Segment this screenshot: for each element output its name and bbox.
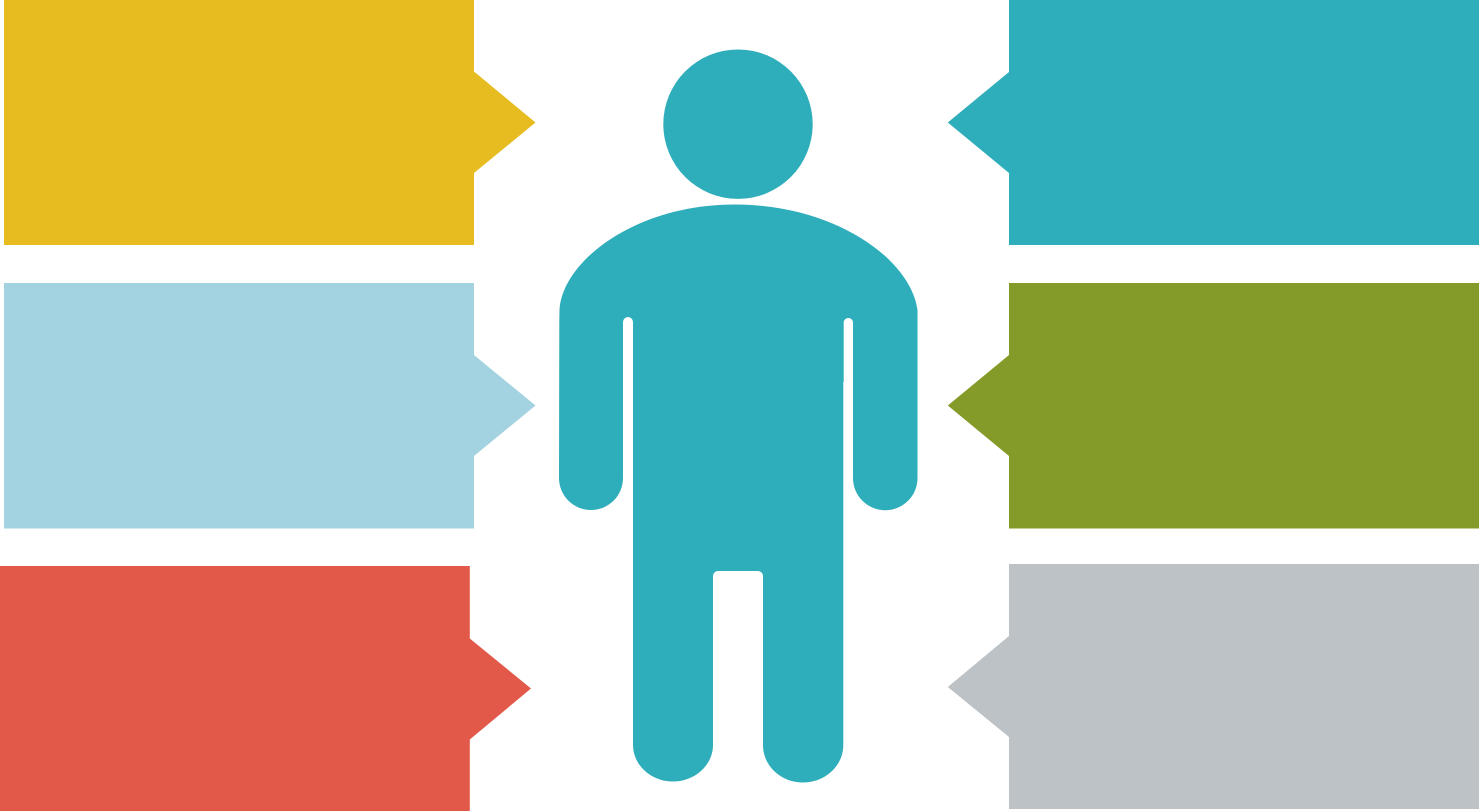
panel: yellow arrow box, top left bbox=[4, 0, 536, 245]
panel: teal arrow box, top right bbox=[948, 0, 1479, 245]
panel: light blue arrow box, middle left bbox=[4, 283, 536, 528]
icon: human figure bbox=[559, 50, 918, 782]
panel: olive arrow box, middle right bbox=[948, 283, 1479, 528]
panel: grey arrow box, bottom right bbox=[948, 564, 1479, 809]
icon: body bbox=[559, 204, 918, 782]
panel: red arrow box, bottom left bbox=[0, 566, 531, 811]
icon: head bbox=[663, 50, 813, 199]
